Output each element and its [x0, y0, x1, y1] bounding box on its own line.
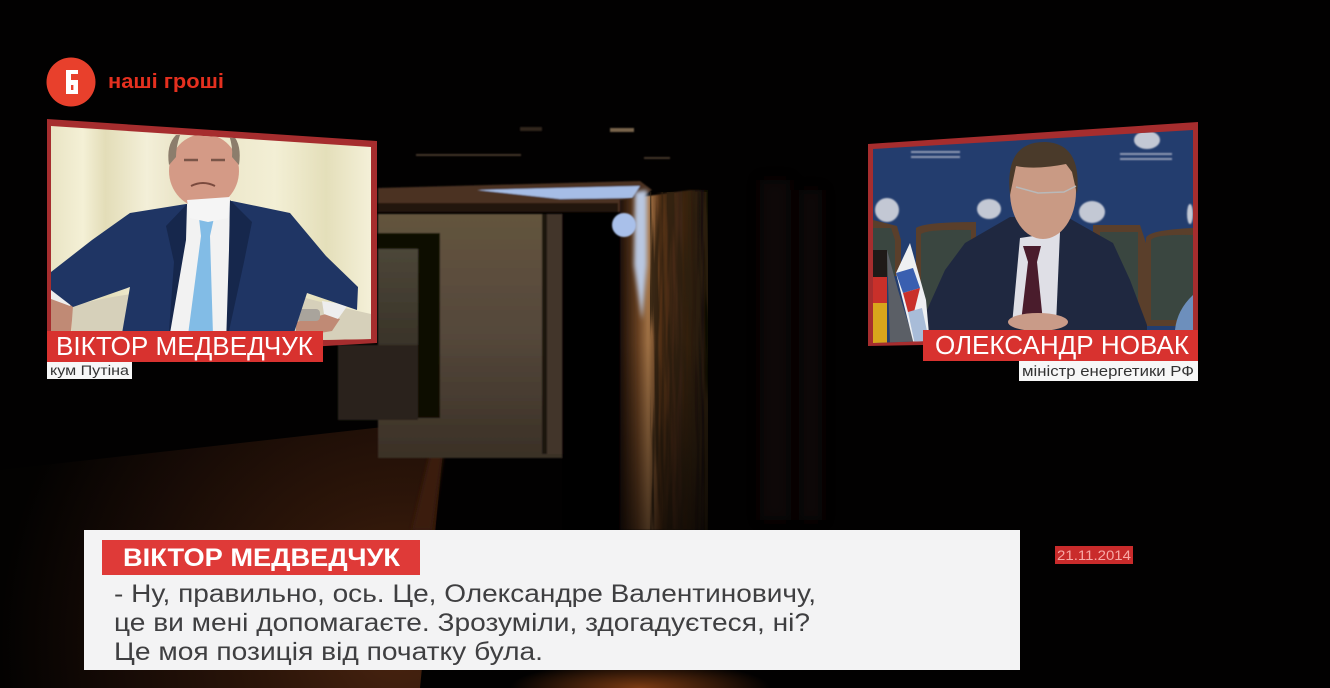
quote text: Це моя позиція від початку була.: [114, 638, 543, 666]
light glare: [612, 190, 647, 320]
tie: [188, 218, 214, 335]
brand name: наші гроші: [108, 71, 224, 93]
Russian flag: [896, 243, 930, 345]
cellar wall with door: [338, 212, 620, 530]
date label: 21.11.2014: [1057, 547, 1131, 563]
flag shadow: [887, 250, 913, 342]
panel: right portrait: [868, 122, 1198, 350]
role label: Novak: [1019, 361, 1198, 381]
head: [169, 134, 239, 208]
shirt: [170, 200, 230, 331]
head: [1010, 164, 1076, 239]
photo: [868, 125, 1198, 350]
watch: [296, 309, 320, 321]
right lapel: [226, 200, 252, 345]
frame: [47, 119, 377, 362]
emblems: [875, 131, 1193, 224]
cellar floor edge: [412, 420, 448, 530]
hands: [51, 299, 340, 332]
quote text: це ви мені допомагаєте. Зрозуміли, здогадуєтеся, ні?: [114, 609, 810, 637]
panel: quote: [84, 530, 1020, 670]
far right pillars: [760, 180, 822, 520]
neighbour's arm: [1175, 295, 1193, 330]
hands: [1008, 313, 1068, 331]
name label: Novak: ОЛЕКСАНДР НОВАК: [935, 330, 1189, 360]
role label: Novak: міністр енергетики РФ: [1022, 364, 1194, 380]
chairs: [873, 220, 1193, 326]
left lapel: [166, 204, 187, 345]
suit: [925, 217, 1147, 335]
logo: [46, 58, 96, 106]
role label: Medvedchuk: [47, 362, 132, 379]
armchair: [72, 294, 371, 340]
tie: [1022, 246, 1042, 314]
collar: [187, 197, 230, 222]
speaker tag: ВІКТОР МЕДВЕДЧУК: [123, 544, 401, 572]
quote text: [114, 580, 816, 666]
role label: Medvedchuk: кум Путіна: [50, 363, 130, 378]
rusty corner pillar: [620, 190, 708, 530]
ceiling lines: [416, 127, 670, 159]
name label: Medvedchuk: ВІКТОР МЕДВЕДЧУК: [56, 331, 313, 361]
floor glow: [420, 650, 840, 688]
photo: [51, 120, 371, 350]
logo circle: [46, 58, 96, 106]
cellar floor: [0, 420, 446, 688]
German flag: [873, 250, 887, 345]
rusty ceiling beam: [378, 181, 652, 212]
logo mark: [66, 70, 78, 94]
cuffs: [51, 289, 348, 319]
frame: [868, 122, 1198, 346]
panel: left portrait: [47, 119, 377, 362]
speaker tag: [102, 540, 420, 575]
suit: [51, 201, 358, 345]
quote text: - Ну, правильно, ось. Це, Олександре Валентиновичу,: [114, 580, 816, 608]
shirt: [1012, 232, 1060, 325]
